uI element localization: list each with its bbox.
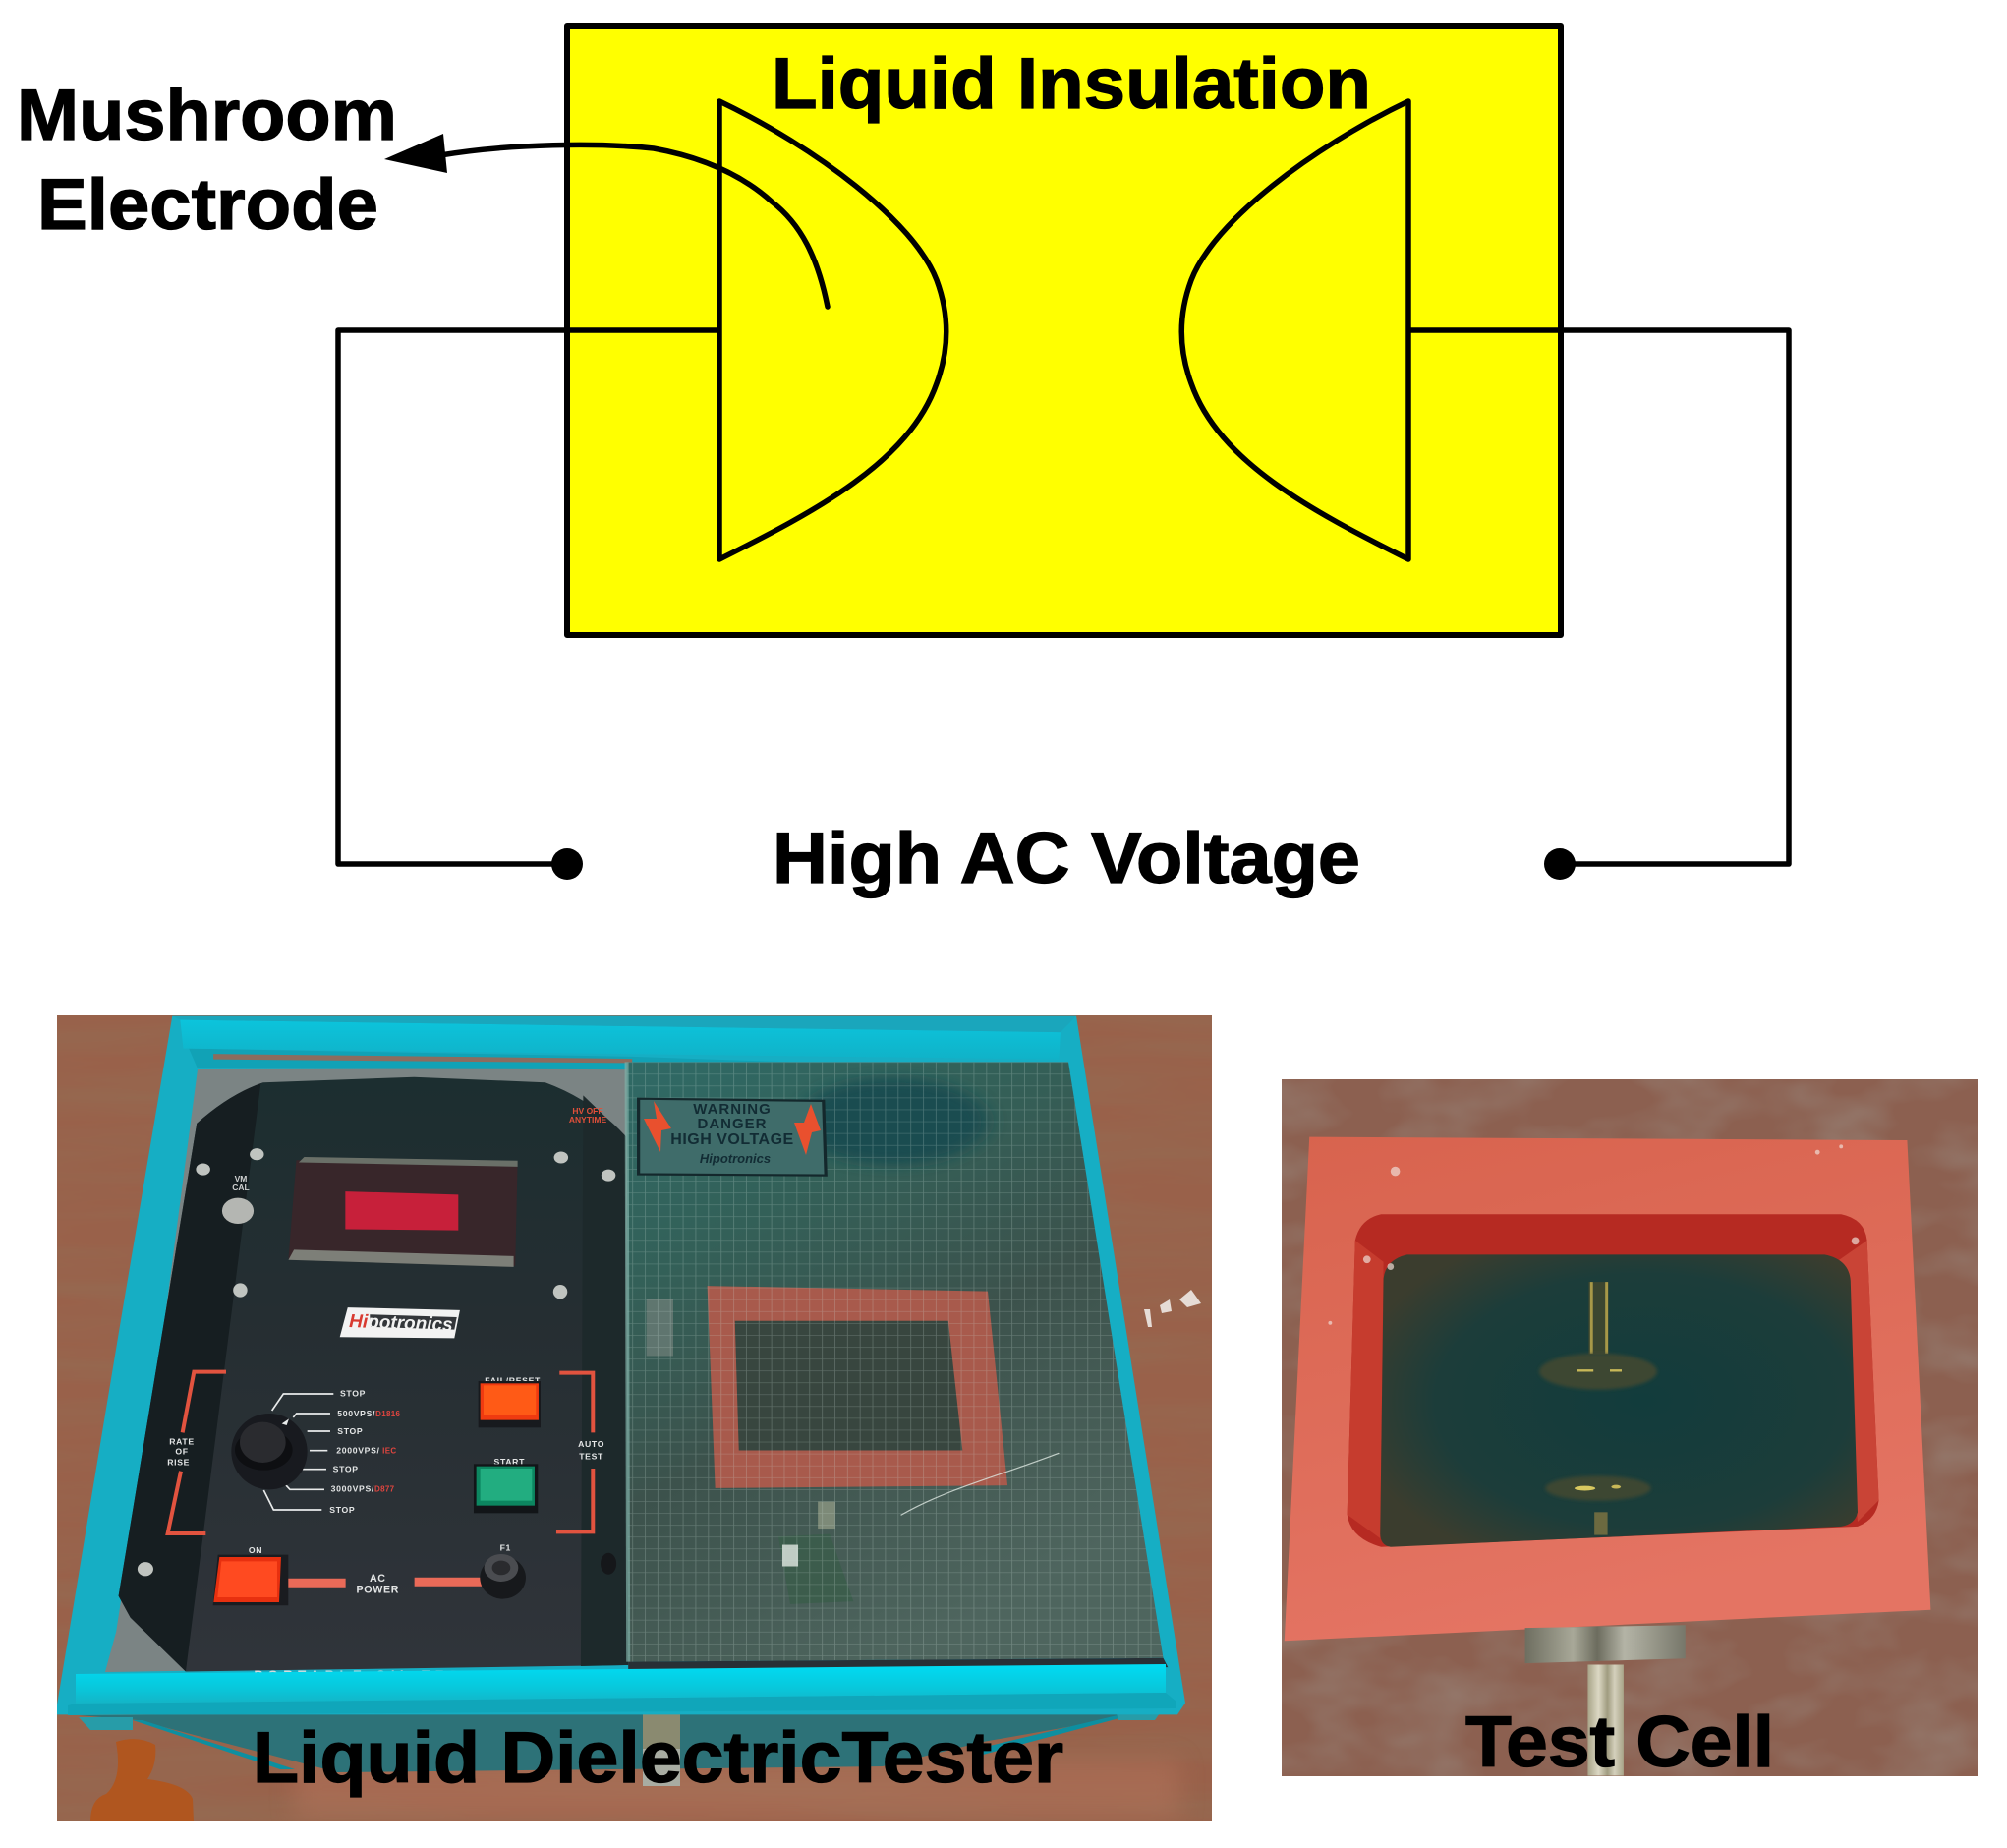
label: electrode: Electrode	[37, 165, 378, 245]
arrow: mushroom electrode pointer	[384, 134, 828, 307]
warning sign text: HIGH VOLTAGE	[670, 1131, 794, 1148]
wood background	[1282, 1079, 1978, 1776]
case edge strips	[133, 1715, 1130, 1769]
display bottom glare	[288, 1249, 514, 1267]
terminal: left	[551, 848, 583, 880]
dust spots	[1328, 1144, 1859, 1325]
photo: liquid dielectric tester	[57, 1015, 1212, 1821]
top lower rail	[189, 1049, 790, 1070]
panel labels: AUTO	[578, 1439, 604, 1449]
dark shadow patch	[798, 1078, 988, 1165]
label: liquid dielectric tester: Liquid DielectricTester	[253, 1718, 1063, 1798]
warning bolts	[644, 1101, 821, 1155]
panel dark right strip	[581, 1095, 628, 1666]
latch reflection	[647, 1299, 673, 1356]
reflected test cell	[708, 1286, 1007, 1488]
panel labels: RISE	[167, 1457, 190, 1467]
fail/reset button	[479, 1381, 541, 1427]
top rod	[213, 1054, 632, 1063]
rust stain	[90, 1739, 194, 1821]
bottom bar	[68, 1664, 1176, 1715]
panel controls	[167, 1372, 604, 1682]
warning sign	[639, 1099, 826, 1176]
Hipotronics logo plate	[340, 1307, 460, 1338]
AC power line	[282, 1569, 482, 1596]
tester case front	[79, 1714, 1117, 1772]
panel labels: ON	[249, 1545, 262, 1555]
warning sign text: DANGER	[697, 1116, 768, 1132]
case latch	[643, 1713, 680, 1786]
wood background	[57, 1015, 1212, 1821]
mesh	[627, 1062, 1163, 1662]
label: test cell: Test Cell	[1465, 1703, 1774, 1782]
panel: schematic diagram	[17, 26, 1789, 898]
glass frame edge	[627, 1062, 628, 1662]
Hipotronics logo text: Hipotronics	[349, 1311, 453, 1336]
label: liquid insulation: Liquid Insulation	[772, 44, 1371, 124]
display bezel	[288, 1160, 518, 1266]
start button	[474, 1464, 538, 1513]
warning sign text: WARNING	[693, 1101, 772, 1118]
dark ledge under glass	[628, 1657, 1168, 1669]
panel labels: STOP	[340, 1389, 366, 1399]
cavity	[1348, 1214, 1879, 1547]
panel labels: STOP	[337, 1426, 363, 1436]
panel screws	[138, 1148, 615, 1576]
panel labels: RATE	[169, 1436, 195, 1446]
gray backing paper	[105, 1068, 632, 1672]
stem	[1587, 1665, 1624, 1776]
panel labels: STOP	[329, 1505, 355, 1515]
panel labels: FAIL/RESET	[485, 1376, 541, 1386]
panel labels: OF	[175, 1447, 189, 1457]
liquid insulation tank	[567, 26, 1561, 635]
speckles on wood	[1144, 1290, 1201, 1327]
reflected cell stem	[778, 1534, 853, 1604]
top bar	[181, 1020, 1061, 1052]
panel labels: F1	[500, 1542, 511, 1552]
warning sign text	[670, 1101, 794, 1166]
display top glare	[299, 1157, 518, 1167]
HV off label	[569, 1108, 606, 1123]
right mushroom electrode	[1181, 101, 1408, 559]
glass cover	[627, 1062, 1163, 1662]
VM CAL label	[232, 1176, 250, 1190]
panel labels: START	[494, 1457, 525, 1467]
lower electrode reflection	[1545, 1475, 1651, 1535]
control panel	[119, 1077, 628, 1672]
cell body	[1285, 1137, 1930, 1641]
oil	[1380, 1254, 1858, 1547]
label: high AC voltage: High AC Voltage	[773, 819, 1360, 898]
rate selector leaders	[263, 1394, 333, 1510]
VM CAL label: VM	[235, 1174, 247, 1184]
on button	[213, 1555, 288, 1605]
wiring: right lead	[1408, 330, 1789, 864]
panel labels: TEST	[579, 1452, 603, 1462]
panel labels: POWER	[357, 1585, 399, 1596]
panel labels	[167, 1376, 604, 1596]
flange	[1525, 1625, 1686, 1663]
rate selector knob	[231, 1414, 308, 1489]
glass scratch	[901, 1453, 1059, 1515]
terminal: right	[1544, 848, 1576, 880]
warning sign text: Hipotronics	[700, 1151, 771, 1166]
left mushroom electrode	[719, 101, 946, 559]
panel dark left strip	[119, 1082, 263, 1672]
VM CAL label: CAL	[232, 1183, 250, 1192]
panel labels: 3000VPS/D877	[331, 1484, 395, 1494]
HV off label: HV OFF	[572, 1106, 603, 1116]
auto test bracket	[556, 1373, 593, 1531]
wiring: left lead	[338, 330, 719, 864]
rate of rise bracket	[168, 1372, 226, 1533]
cavity left wall	[1348, 1241, 1384, 1538]
display red window	[345, 1191, 458, 1231]
cavity right wall	[1836, 1241, 1879, 1522]
photo: test cell	[1282, 1079, 1978, 1782]
jack	[601, 1553, 616, 1575]
panel lettering: PORTABLE OIL TESTER	[254, 1667, 500, 1682]
panel labels: 500VPS/D1816	[337, 1409, 401, 1418]
panel labels: STOP	[333, 1464, 359, 1473]
label: mushroom: Mushroom	[17, 76, 397, 155]
fuse holder	[480, 1554, 526, 1599]
case feet	[79, 1714, 1159, 1730]
panel labels: AC	[370, 1573, 386, 1585]
panel labels: 2000VPS/ IEC	[336, 1445, 397, 1455]
HV off label: ANYTIME	[569, 1115, 606, 1125]
upper electrode reflection	[1539, 1282, 1657, 1390]
case body	[57, 1016, 1185, 1714]
VM CAL button	[222, 1198, 254, 1224]
